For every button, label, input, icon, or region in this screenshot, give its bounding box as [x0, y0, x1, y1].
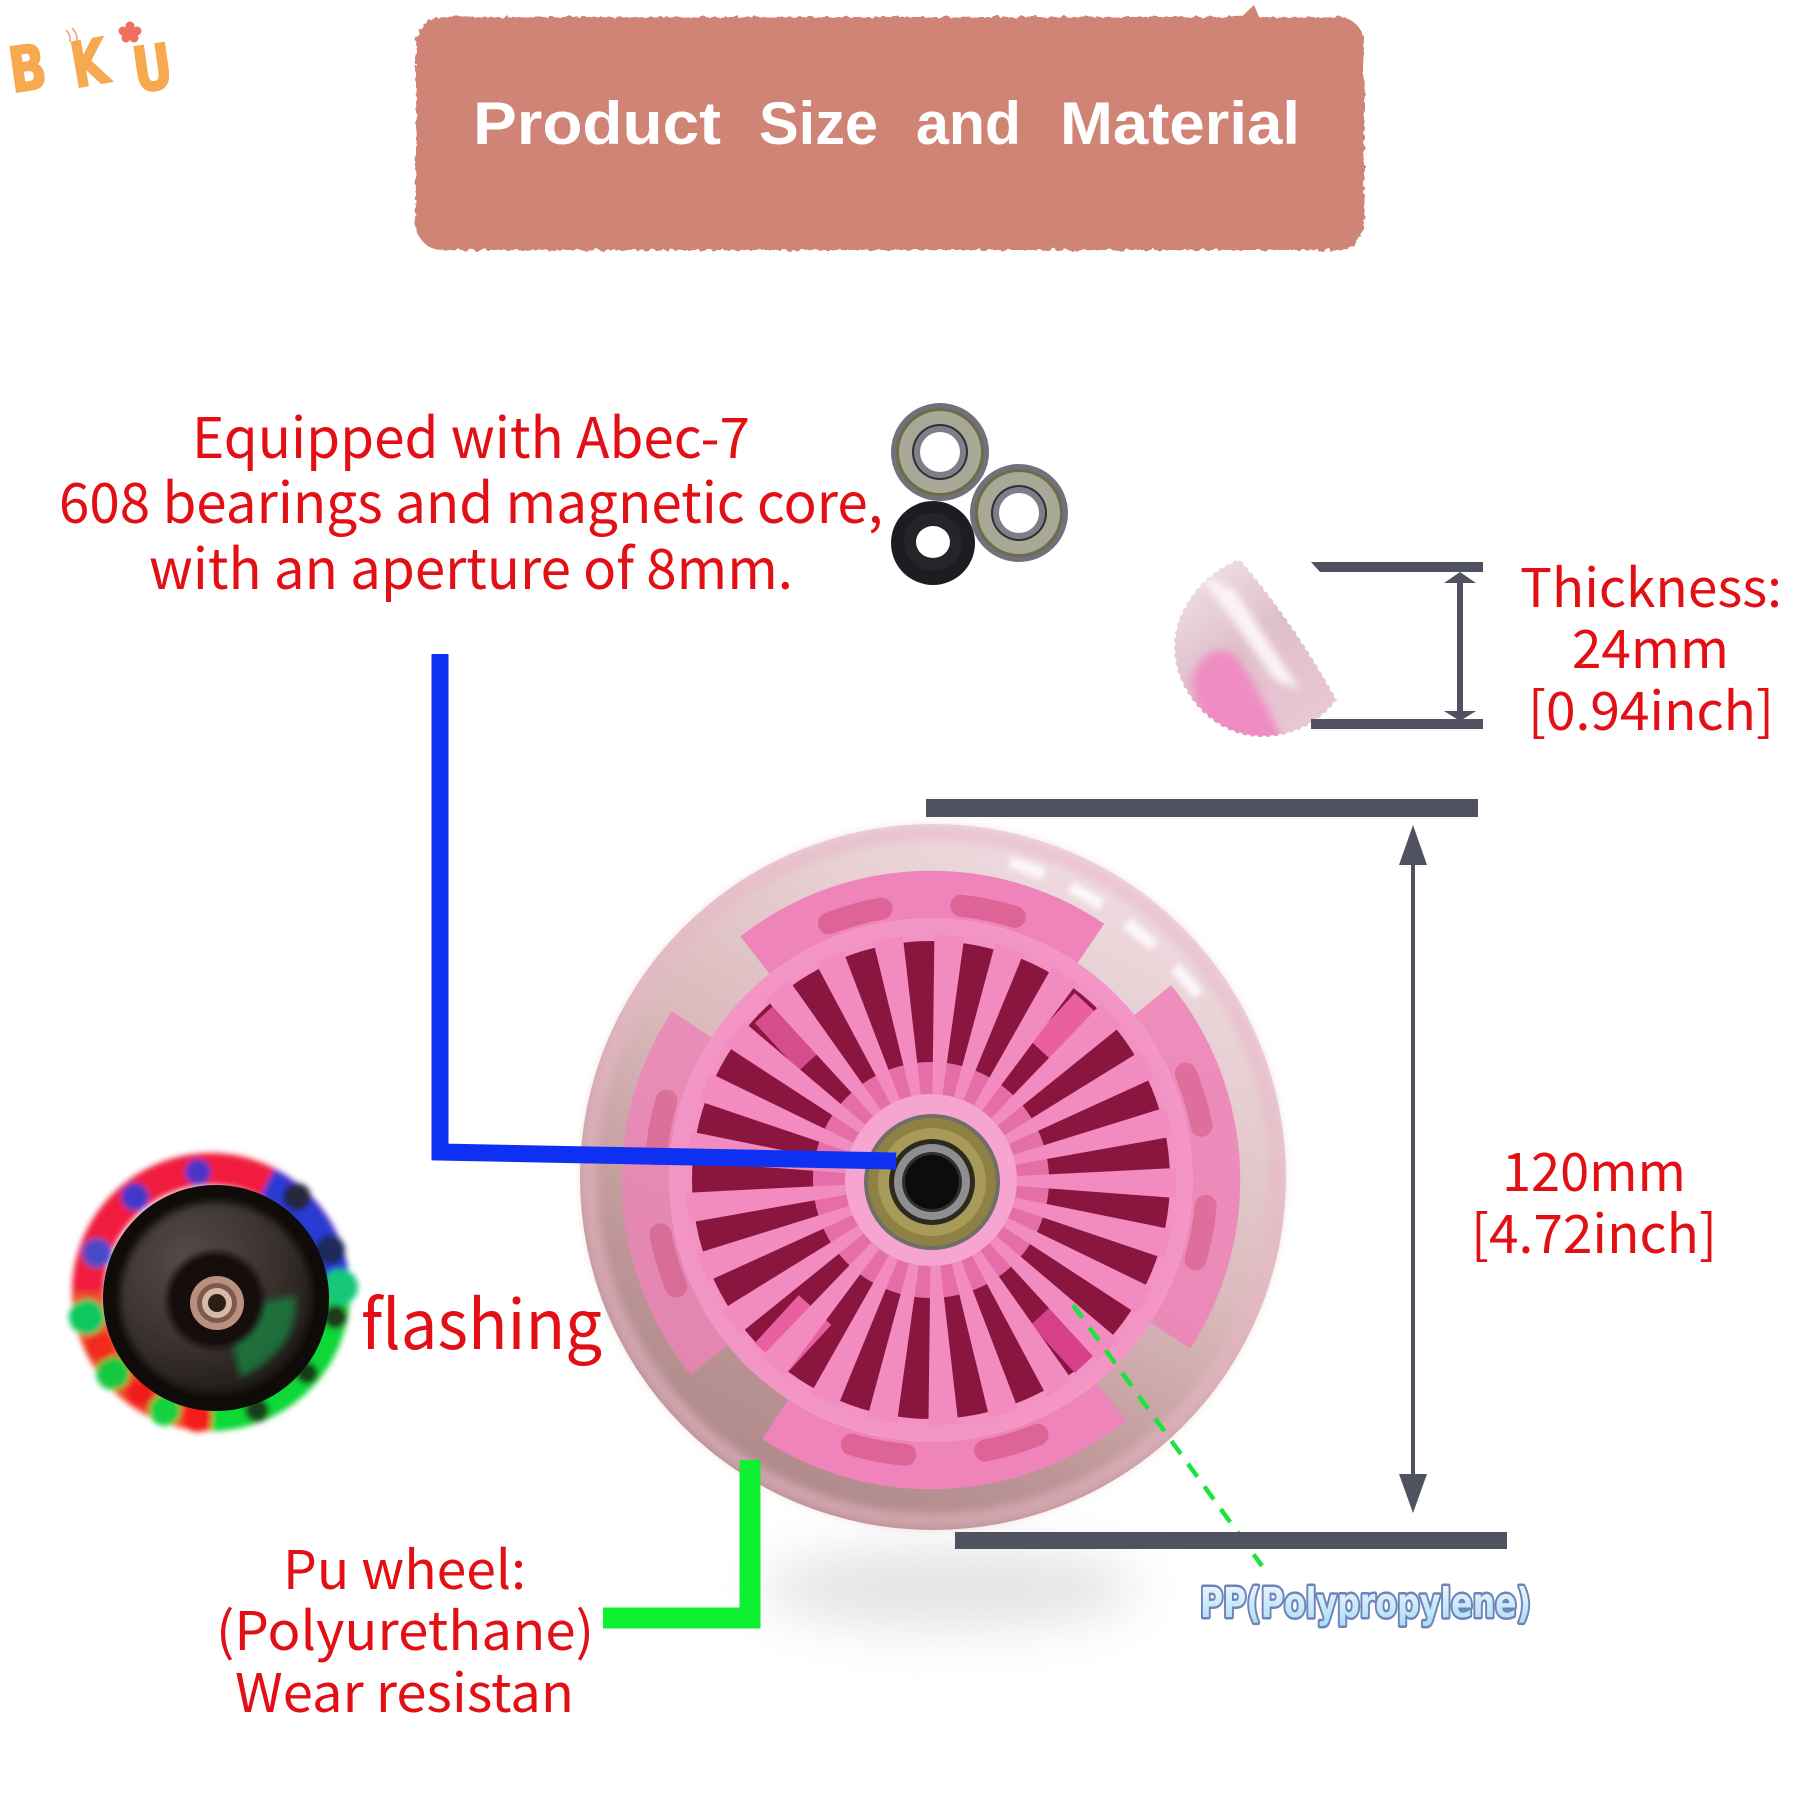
- main pink wheel: [580, 824, 1286, 1530]
- icon: upper bearing: [891, 403, 989, 501]
- height label: [4.72inch]: [1471, 1193, 1717, 1269]
- title text: [473, 90, 1300, 157]
- thickness label: Thickness:: [1520, 547, 1782, 623]
- dark windows behind spokes: [692, 941, 1170, 1419]
- polyurethane tyre: [580, 824, 1286, 1530]
- PU wheel label: Wear resistan: [235, 1652, 574, 1728]
- PU wheel label: (Polyurethane): [216, 1590, 594, 1666]
- top height bar: [926, 799, 1478, 817]
- bearing callout text: Equipped with Abec-7: [192, 394, 750, 475]
- title text: Product: [473, 90, 721, 157]
- thickness dimension bracket: [1311, 562, 1483, 729]
- height label: [1471, 1131, 1717, 1269]
- bearing callout text: [59, 394, 883, 606]
- flashing label: flashing: [361, 1270, 602, 1369]
- bearing callout text: with an aperture of 8mm.: [149, 525, 793, 606]
- brand logo: BKU: K: [65, 24, 115, 102]
- height arrow: [1399, 825, 1427, 1513]
- PP label: PP(Polypropylene): [1200, 1579, 1531, 1627]
- flashing wheel photo: [69, 1159, 358, 1432]
- blue leader line to bearing: [440, 654, 896, 1161]
- title banner: [416, 5, 1364, 250]
- PU wheel label: [216, 1529, 594, 1728]
- title text: Size: [759, 90, 878, 157]
- wheel drop shadow: [760, 1548, 1140, 1628]
- spokes: [686, 935, 1176, 1425]
- height label: 120mm: [1502, 1131, 1686, 1207]
- icon: right bearing: [970, 464, 1068, 562]
- bearing callout text: 608 bearings and magnetic core,: [59, 459, 883, 540]
- LED ring: [69, 1159, 358, 1432]
- brand logo: BKU: B: [4, 30, 51, 107]
- icon: bearings: [891, 403, 1068, 585]
- thickness wheel section: [1174, 559, 1337, 745]
- bottom height bar: [955, 1532, 1507, 1549]
- centre bearing: [864, 1114, 1000, 1250]
- thickness label: 24mm: [1572, 608, 1729, 684]
- icon: black seal: [891, 501, 975, 585]
- polypropylene hub: [613, 865, 1249, 1498]
- thickness label: [0.94inch]: [1528, 670, 1774, 746]
- green dashed leader to hub: [1073, 1305, 1262, 1566]
- thickness label: [1520, 547, 1782, 746]
- PU wheel label: Pu wheel:: [283, 1529, 526, 1605]
- title text: Material: [1060, 90, 1300, 157]
- brand logo: BKU: U: [128, 30, 177, 107]
- brand logo: BKU: [4, 22, 177, 107]
- hub flange lobes with slots: [613, 865, 1249, 1498]
- green leader line to tyre: [603, 1460, 750, 1618]
- title text: and: [916, 90, 1021, 157]
